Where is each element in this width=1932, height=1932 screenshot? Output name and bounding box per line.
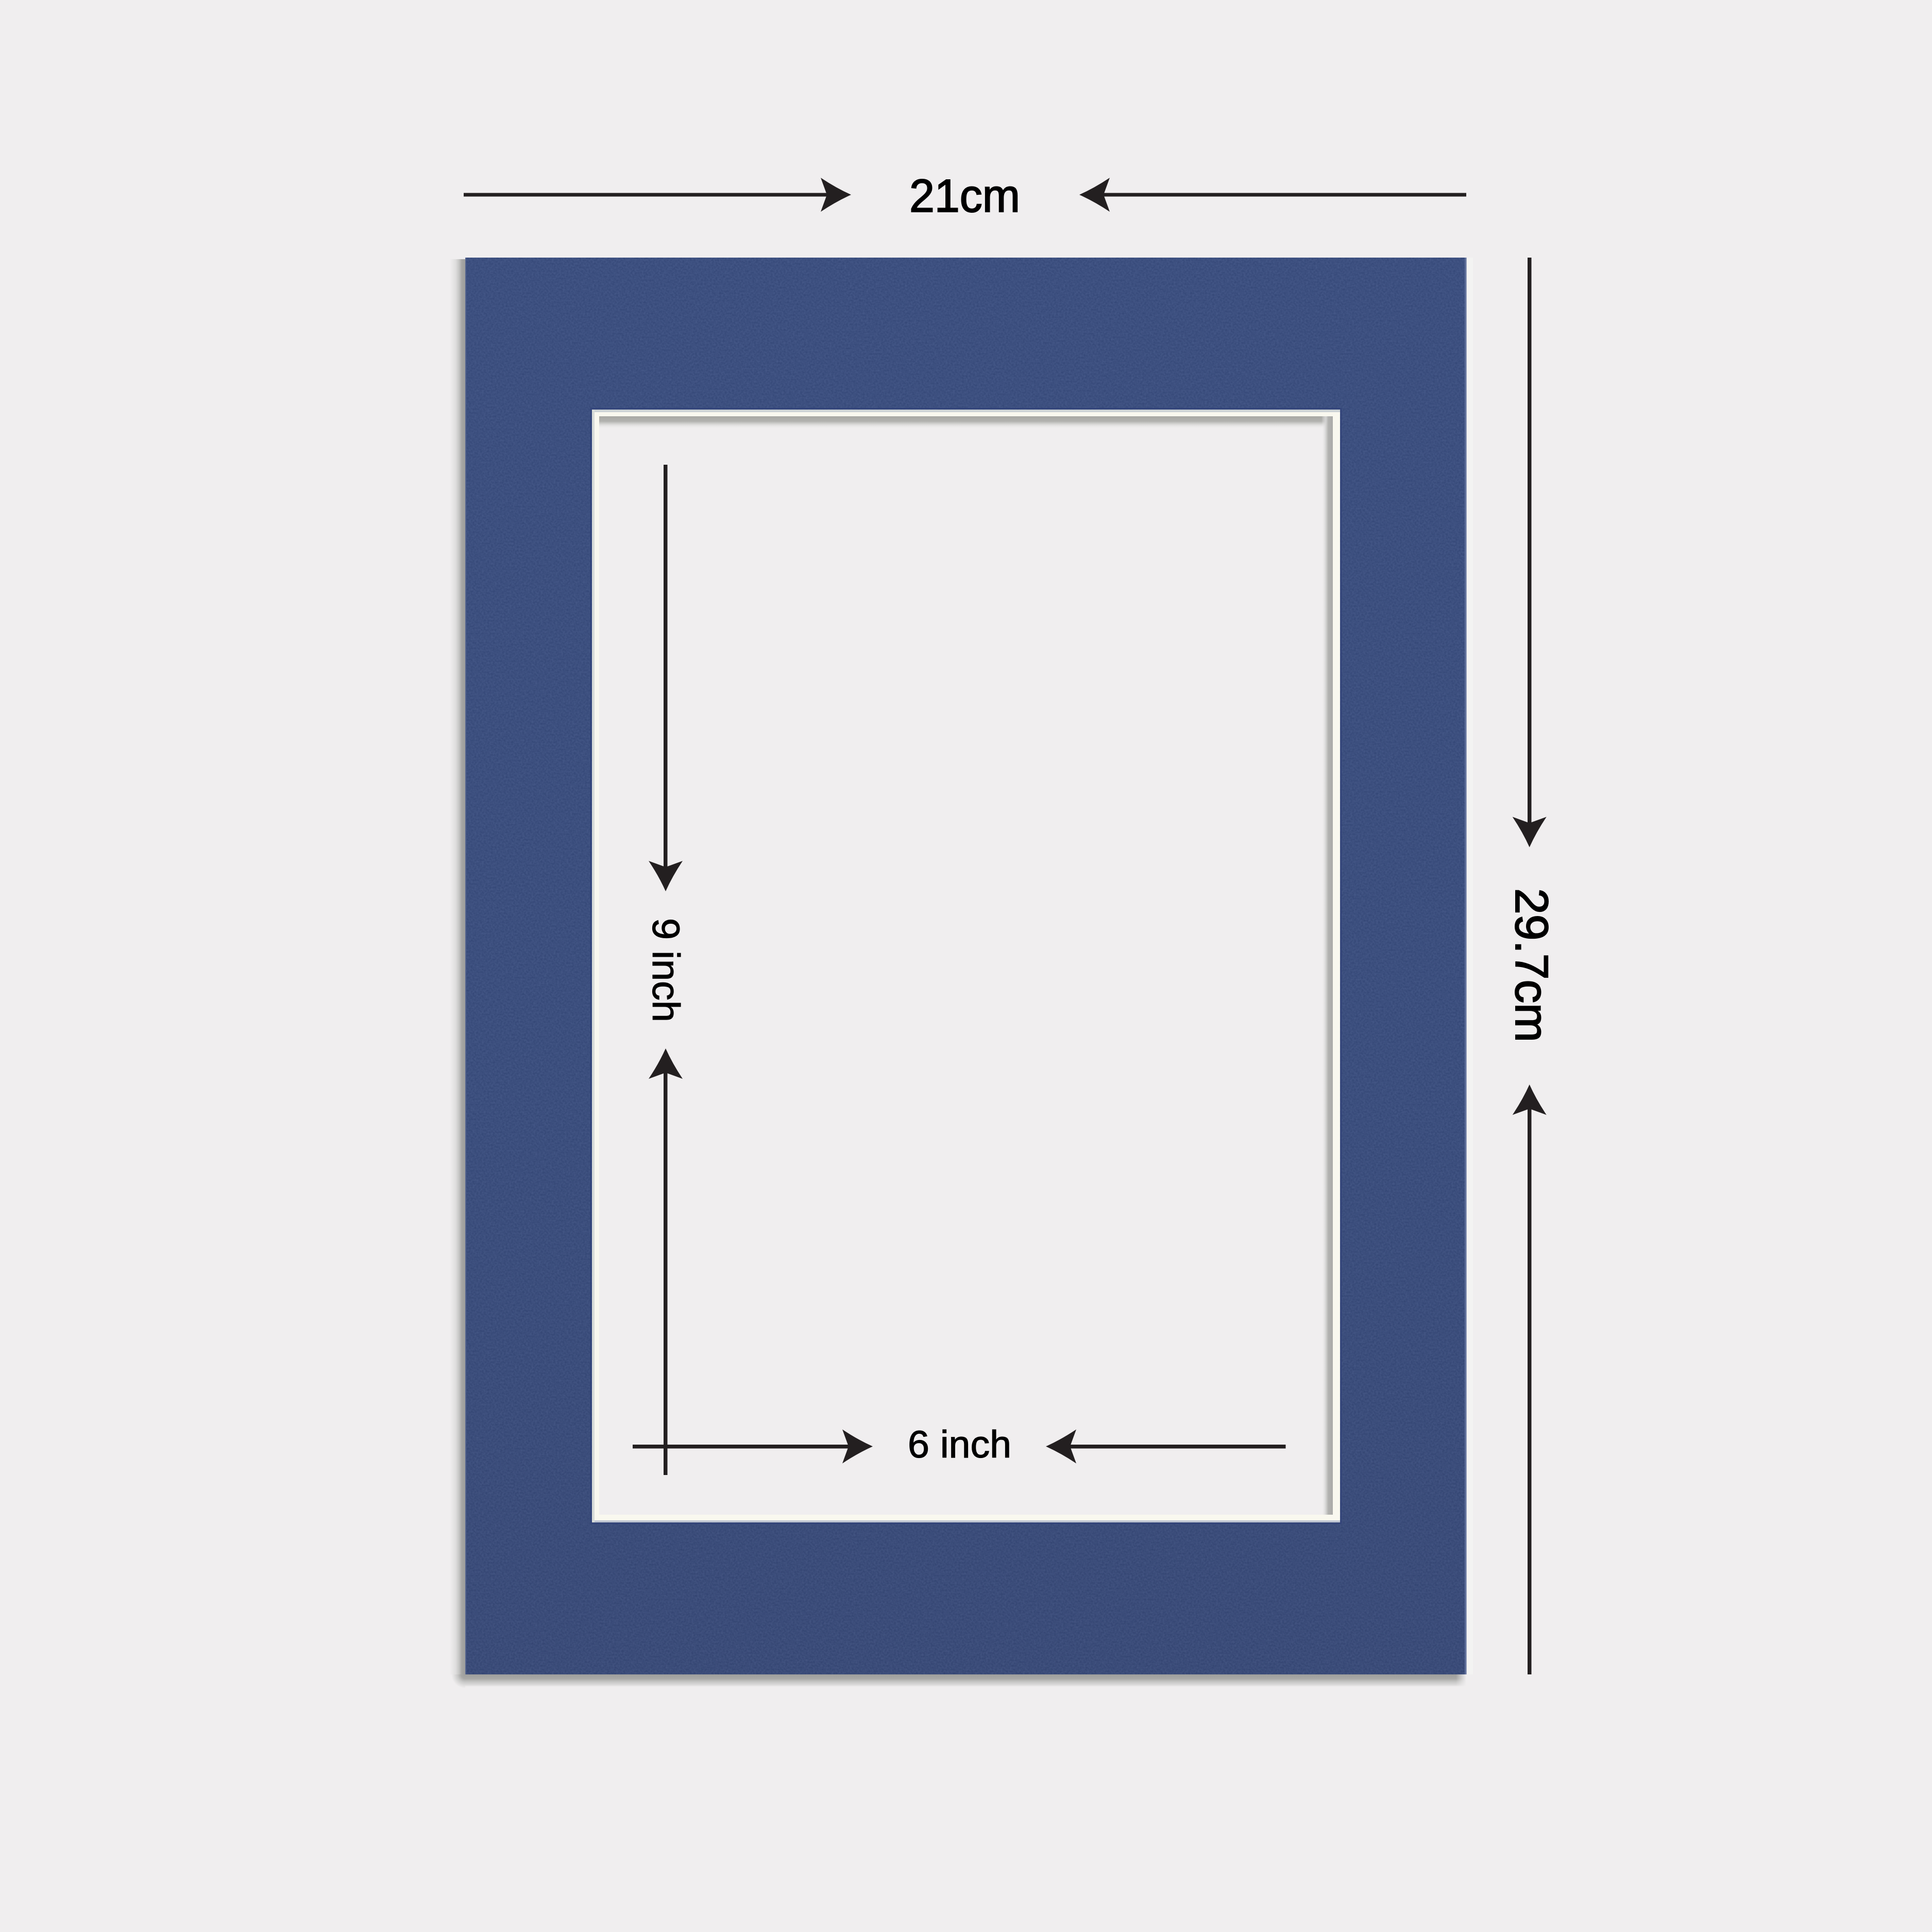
arrow: top pointing down: [1513, 258, 1547, 847]
arrow: left pointing right: [633, 1429, 873, 1463]
mat edge highlight: [465, 258, 1473, 1674]
arrow: left pointing right: [464, 178, 851, 212]
arrow: top pointing down: [649, 465, 683, 891]
dimension: 6 inch aperture width: [633, 1423, 1286, 1466]
drop shadow: [450, 259, 1466, 1688]
dimension: 29.7cm height: [1505, 258, 1557, 1674]
label: 21cm: 21cm: [909, 171, 1020, 222]
label: 29.7cm: 29.7cm: [1505, 888, 1557, 1042]
dimension: 9 inch aperture height: [645, 465, 687, 1475]
panel: mount board with drop shadow and aperture: [450, 258, 1473, 1688]
navy card mat: [465, 258, 1466, 1674]
aperture: [591, 409, 1341, 1523]
label: 6 inch: 6 inch: [908, 1423, 1011, 1466]
arrow: right pointing left: [1079, 178, 1466, 212]
dimension: 21cm width: [464, 171, 1466, 222]
arrow: bottom pointing up: [1513, 1084, 1547, 1674]
label: 9 inch: 9 inch: [645, 918, 687, 1022]
arrow: bottom pointing up: [649, 1048, 683, 1475]
arrow: right pointing left: [1046, 1429, 1286, 1463]
